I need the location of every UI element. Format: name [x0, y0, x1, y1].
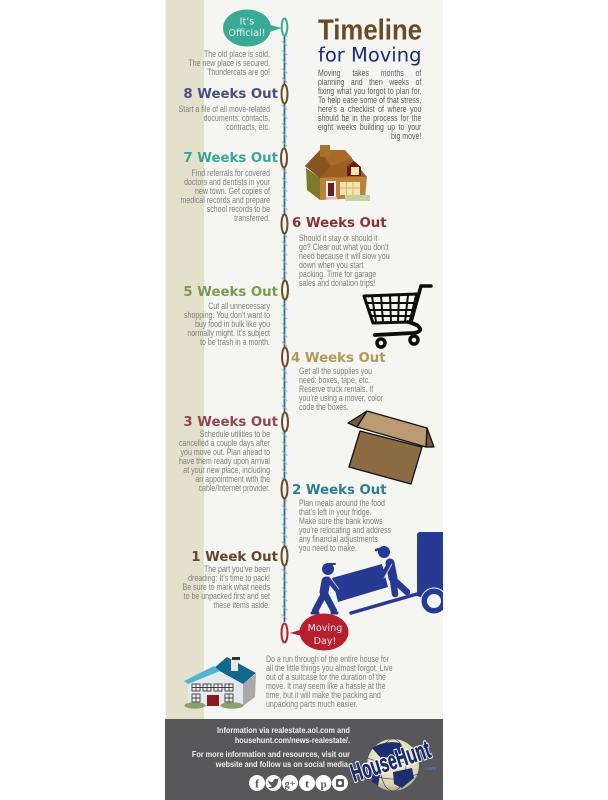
1 week out: 1 Week Out	[191, 550, 279, 565]
icon: cardboard box	[348, 411, 434, 484]
HouseHunt logo: HouseHunt	[347, 736, 434, 788]
7 weeks out: new town. Get copies of	[195, 186, 271, 196]
title: for Moving	[318, 44, 421, 66]
5 weeks out: shopping. You don’t want to	[184, 310, 270, 320]
4 weeks out: need: boxes, tape, etc.	[299, 375, 370, 385]
7 weeks out: 7 Weeks Out	[183, 151, 279, 166]
8 weeks out: 8 Weeks Out	[183, 87, 279, 102]
social icons: f	[255, 776, 260, 790]
mover left	[312, 563, 339, 613]
3 weeks out: at your new place, including	[183, 465, 270, 475]
footer text: househunt.com/news-realestate/.	[235, 736, 350, 745]
6 weeks out: down when you start	[299, 260, 364, 270]
4 weeks out: Reserve truck rentals. If	[299, 384, 374, 394]
intro paragraph	[318, 68, 422, 141]
bubble: Moving Day: Day!	[314, 636, 336, 647]
6 weeks out: need because it will slow you	[299, 251, 390, 261]
2 weeks out: 2 Weeks Out	[292, 483, 387, 498]
moving day text: all the little things you almost forgot. Live	[266, 663, 393, 673]
moving day text	[266, 654, 393, 709]
7 weeks out	[181, 151, 279, 223]
title	[318, 14, 422, 66]
7 weeks out: school records to be	[207, 204, 271, 214]
intro paragraph: eight weeks building up to your	[318, 122, 421, 132]
bubble: Moving Day	[290, 614, 348, 650]
3 weeks out: you move out. Plan ahead to	[181, 447, 270, 457]
icon: shopping cart	[364, 286, 431, 347]
8 weeks out: Start a file of all move-related	[179, 104, 270, 114]
social icons: g+	[285, 779, 296, 790]
moving day text: move. It may seem like a hassle at the	[266, 681, 386, 691]
7 weeks out: transferred.	[234, 213, 270, 223]
3 weeks out: cancelled a couple days after	[179, 438, 270, 448]
2 weeks out: any financial adjustments	[299, 534, 378, 544]
2 weeks out: Make sure the bank knows	[299, 516, 383, 526]
2 weeks out: you’re relocating and address	[299, 525, 391, 535]
background panel	[165, 0, 443, 719]
6 weeks out	[292, 216, 390, 288]
2 weeks out: that’s left in your fridge.	[299, 507, 372, 517]
4 weeks out: you’re using a mover, color	[299, 393, 383, 403]
5 weeks out: Cut all unnecessary	[208, 301, 270, 311]
7 weeks out: doctors and dentists in your	[184, 177, 270, 187]
bubble: It's Official: Official!	[228, 28, 266, 39]
footer band	[165, 719, 443, 800]
1 week out: The part you’ve been	[204, 564, 270, 574]
4 weeks out: Get all the supplies you	[299, 366, 372, 376]
1 week out: to be unpacked first and set	[184, 591, 271, 601]
footer text: website and follow us on social media.	[215, 760, 350, 769]
bubble: It's Official: It’s	[240, 16, 254, 28]
1 week out: these items aside.	[213, 600, 270, 610]
1 week out: dreading: It’s time to pack!	[188, 573, 270, 583]
5 weeks out: to be trash in a month.	[200, 337, 270, 347]
intro paragraph: should be in the process for the	[318, 113, 421, 123]
HouseHunt logo: HouseHunt	[347, 736, 434, 788]
intro paragraph: Moving takes months of	[318, 68, 421, 78]
6 weeks out: sales and donation trips!	[299, 278, 375, 288]
HouseHunt logo: .com	[423, 766, 436, 772]
social icons: t	[305, 776, 309, 790]
4 weeks out: 4 Weeks Out	[291, 351, 386, 366]
moving day text: unpacking parts much easier.	[266, 699, 357, 709]
5 weeks out: normally might. It’s subject	[187, 328, 271, 338]
5 weeks out	[183, 285, 279, 347]
7 weeks out: Find referrals for covered	[192, 168, 270, 178]
title: Timeline	[318, 14, 422, 46]
7 weeks out: medical records and prepare	[181, 195, 270, 205]
icon: brown house	[305, 145, 370, 201]
footer text	[192, 726, 350, 769]
6 weeks out: Should it stay or should it	[299, 233, 378, 243]
3 weeks out: an appointment with the	[195, 474, 271, 484]
truck	[351, 532, 447, 614]
left beige strip	[166, 0, 204, 719]
3 weeks out: have them ready upon arrival	[179, 456, 270, 466]
footer text: Information via realestate.aol.com and	[217, 726, 350, 735]
intro text: old place: Thundercats are go!	[207, 67, 270, 77]
8 weeks out: documents: contacts,	[204, 113, 270, 123]
5 weeks out: buy food in bulk like you	[195, 319, 270, 329]
3 weeks out: Schedule utilities to be	[200, 429, 270, 439]
4 weeks out	[291, 351, 386, 412]
2 weeks out: you need to make.	[299, 543, 357, 553]
bubble: It's Official	[223, 10, 282, 46]
6 weeks out: go? Clear out what you don’t	[299, 242, 389, 252]
social icons	[249, 775, 348, 791]
6 weeks out: 6 Weeks Out	[292, 216, 387, 231]
intro paragraph: fixing what you forgot to plan for.	[318, 86, 421, 96]
3 weeks out: 3 Weeks Out	[183, 415, 279, 430]
social icons: p	[320, 778, 327, 790]
3 weeks out	[179, 415, 279, 493]
8 weeks out: contracts, etc.	[226, 122, 270, 132]
8 weeks out	[179, 87, 279, 132]
moving day text: time, but it will make the packing and	[266, 690, 381, 700]
intro text: old place	[188, 49, 270, 77]
icon: movers and truck	[312, 532, 447, 614]
moving day text: out of a suitcase for the duration of the	[266, 672, 386, 682]
moving day text: Do a run through of the entire house for	[266, 654, 389, 664]
1 week out: Be sure to mark what needs	[183, 582, 270, 592]
carried box	[332, 564, 388, 602]
timeline	[281, 18, 289, 642]
intro paragraph: here’s a checklist of where you	[318, 104, 421, 114]
intro paragraph: To help ease some of that stress,	[318, 95, 421, 105]
intro paragraph: planning and then weeks of	[318, 77, 421, 87]
1 week out	[183, 550, 279, 610]
intro text: old place: The old place is sold.	[204, 49, 270, 59]
mover right	[376, 546, 407, 594]
2 weeks out	[292, 483, 391, 553]
6 weeks out: packing. Time for garage	[299, 269, 377, 279]
bubble: Moving Day: Moving	[308, 623, 342, 634]
4 weeks out: code the boxes.	[299, 402, 349, 412]
footer text: For more information and resources, visit our	[192, 750, 350, 759]
2 weeks out: Plan meals around the food	[299, 498, 385, 508]
5 weeks out: 5 Weeks Out	[183, 285, 279, 300]
intro text: old place: The new place is secured.	[188, 58, 270, 68]
3 weeks out: cable/Internet provider.	[199, 483, 270, 493]
intro paragraph: big move!	[391, 131, 421, 141]
icon: white house with teal roof	[184, 657, 256, 709]
